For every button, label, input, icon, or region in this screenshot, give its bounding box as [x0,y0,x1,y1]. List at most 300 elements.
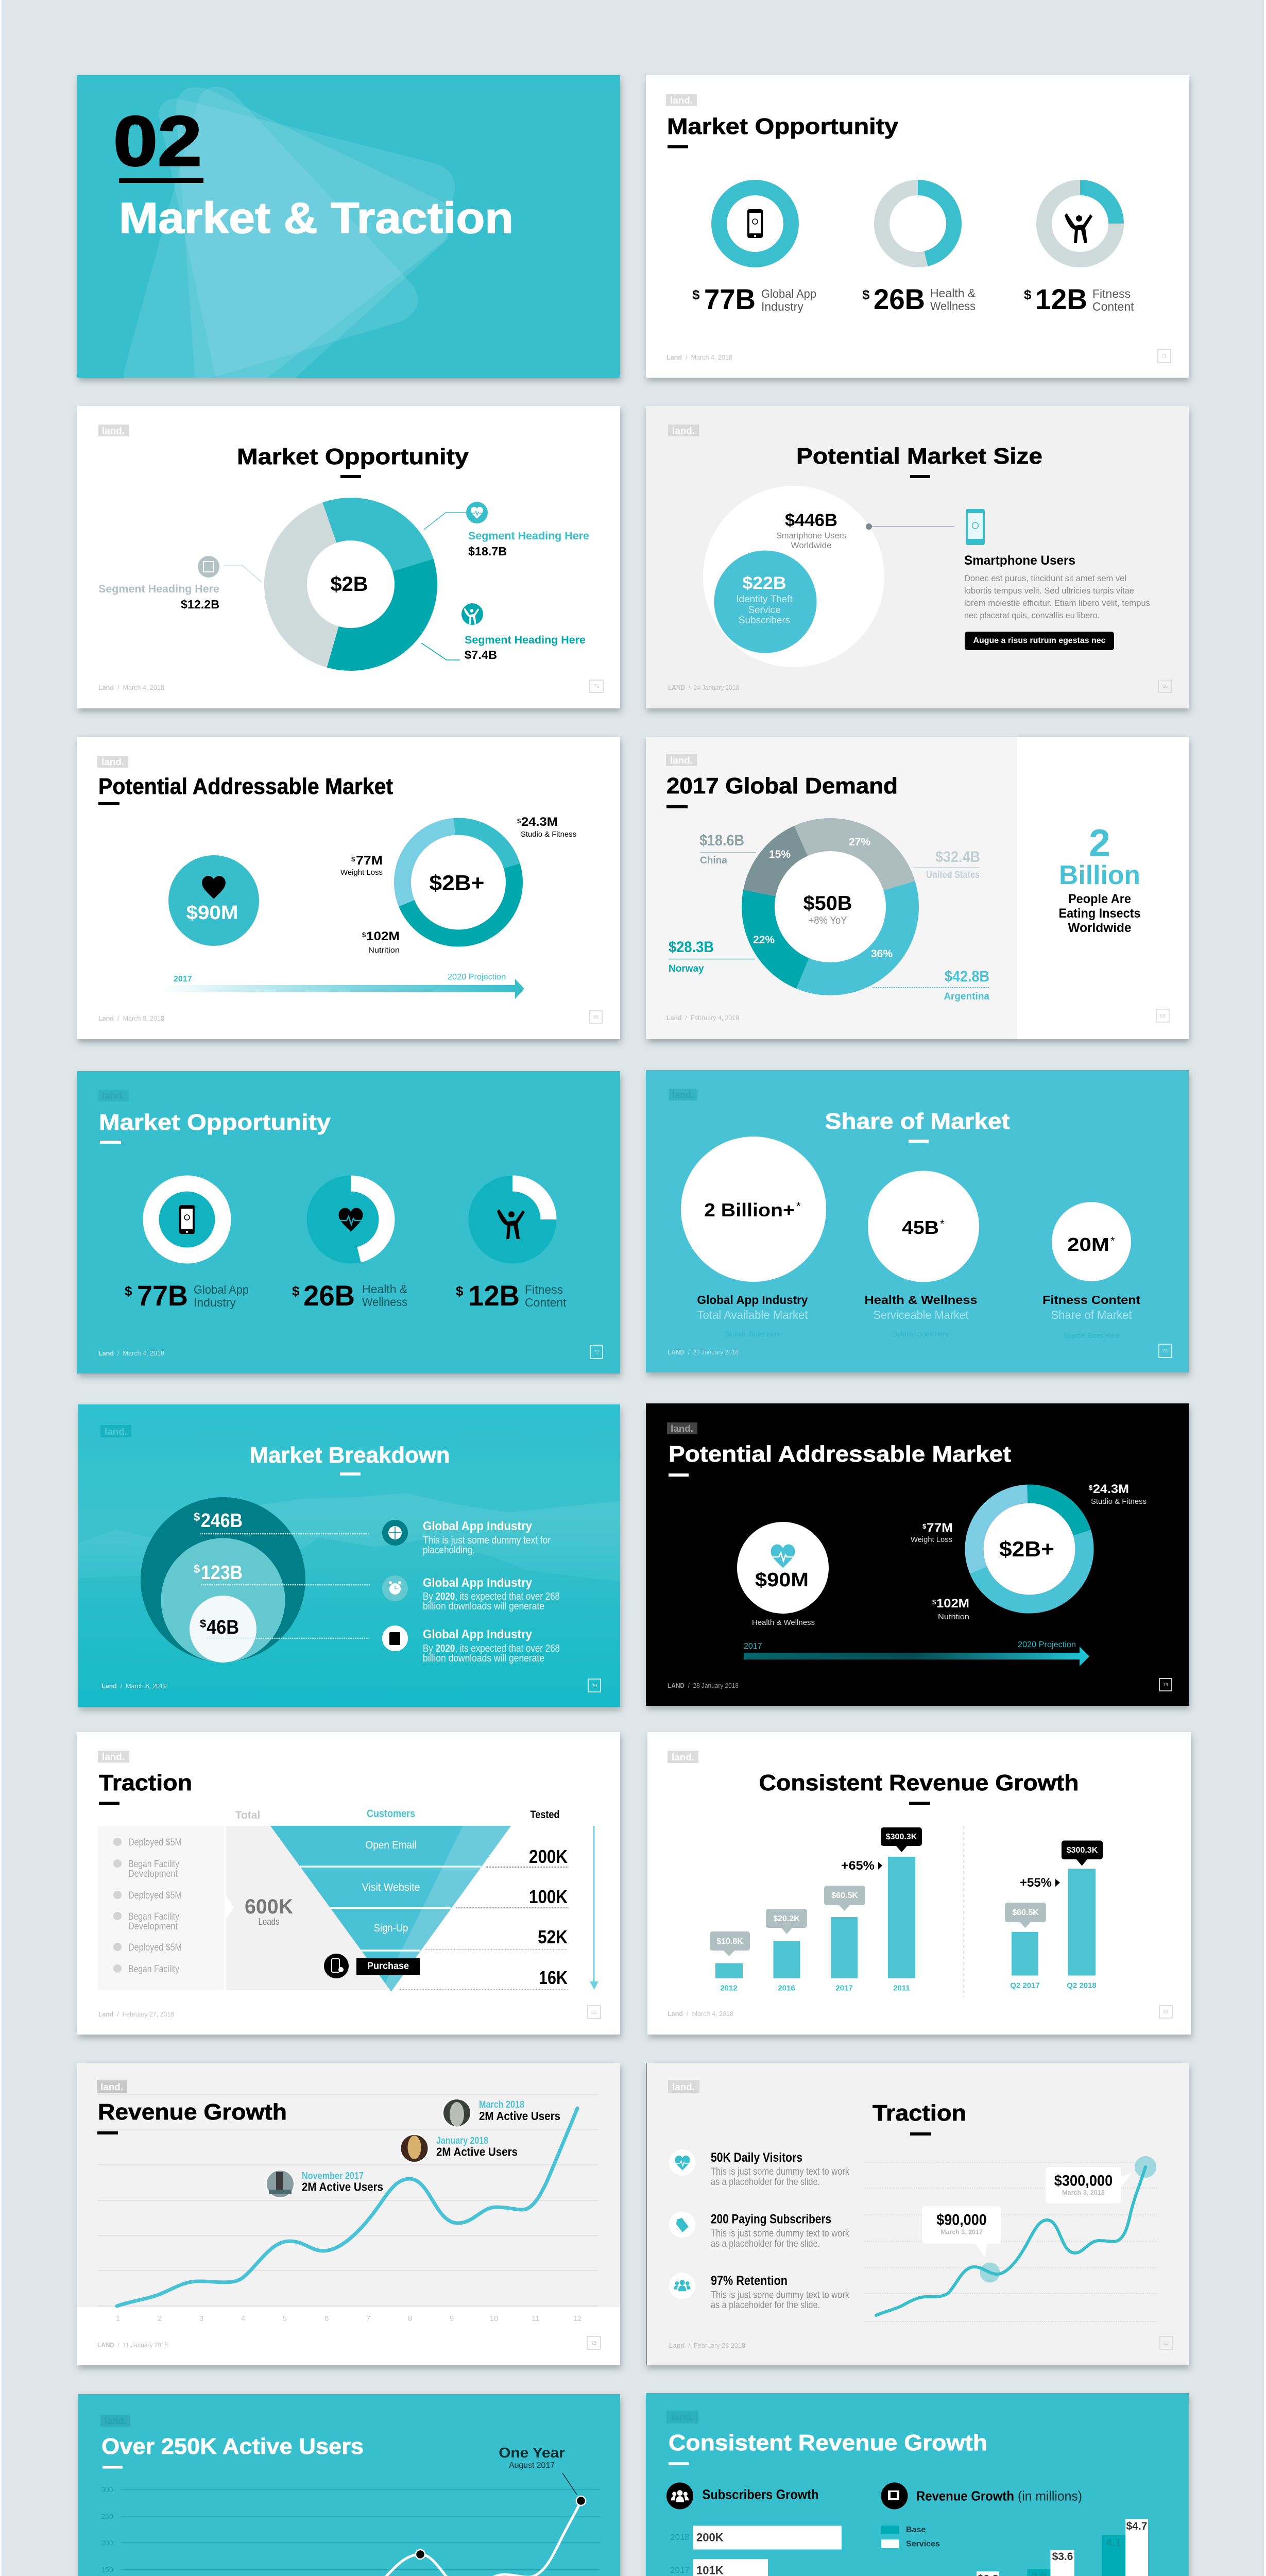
panel: active users line [78,2394,620,2576]
total leads block: 600K [245,1895,293,1918]
metric: paying subscribers: This is just some dummy text to work [711,2228,849,2239]
milestone: March 2018 [443,2099,560,2127]
bar chart: annual: 2017 [835,1984,853,1993]
label: health: Serviceable Market [874,1308,969,1321]
donut center [803,892,852,926]
label: nutrition: 102M [936,1597,969,1611]
inner market circle: Identity Theft [736,594,793,605]
callout: $300,000: $300,000 [1054,2172,1113,2190]
label: studio: $ [1089,1484,1093,1492]
stat: $77B: $ [125,1283,132,1299]
value: $46B: 46B [207,1617,239,1638]
grid lines [121,2489,601,2576]
stat: $26B: Health & [362,1282,407,1296]
logo: land. [105,2416,126,2426]
x axis labels: 8 [408,2314,412,2323]
label: Argentina [872,968,989,1002]
item: global app three: By 2020, its expected that over 268 [423,1643,560,1654]
callout: $60.5K: $60.5K [831,1891,858,1900]
icon: ball [382,1520,408,1546]
logo: land. [670,95,693,106]
title bar [910,2132,931,2136]
milestone list: Deployed $5M [128,1942,182,1953]
heading: subscribers growth [666,2482,819,2509]
footer: 62 [1164,2341,1169,2346]
bar chart: annual: 2012 [720,1984,738,1993]
footer: 63 [1163,2009,1168,2014]
quarter divider [963,1826,964,1997]
label: studio [1089,1482,1147,1506]
icon: clock [382,1575,408,1601]
stat: $26B: Wellness [362,1295,407,1309]
footer: Land / February 27, 2018 [98,2010,174,2018]
logo [668,1751,698,1763]
footer: LAND / 24 January 2018 [668,684,739,691]
icon: glass [382,1625,408,1651]
panel: section cover [77,75,620,378]
label: studio: 24.3M [1093,1482,1129,1496]
arrow timeline [161,973,524,999]
label: health: Source: Goes Here [893,1330,949,1338]
footer: 72 [591,2341,596,2346]
milestone list: Development [128,1869,178,1879]
growth: +55%: +55% [1020,1876,1052,1890]
callout: $20.2K: $20.2K [773,1914,800,1923]
donut: fitness [1044,188,1116,260]
label: health: Health & Wellness [864,1293,978,1307]
stat: $77B: Industry [761,300,803,313]
panel: potential addressable market dark [646,1403,1189,1706]
callout: $300,000: March 3, 2018 [1062,2189,1105,2196]
callout: quarterly $60.5K: $60.5K [1012,1908,1039,1917]
callout: quarterly $300.3K: $300.3K [1067,1846,1098,1855]
growth: +65%: +65% [841,1859,875,1873]
label: nutrition: Nutrition [938,1613,969,1621]
arrow timeline: 2017 [744,1642,762,1651]
chart: revenue bars: $3.6 [1052,2551,1073,2563]
text block: smartphone users: lorem molestie efficitur. Etiam libero velit, tempus [964,598,1150,608]
stat: $77B: 77B [137,1279,188,1312]
button [965,632,1114,650]
users curve [140,2501,581,2576]
bubble: 2 billion [681,1137,826,1282]
logo [100,2415,130,2427]
metric: paying subscribers: as a placeholder for the slide. [711,2239,820,2249]
value: $246B [194,1510,369,1534]
label: weight loss: $ [351,855,355,863]
heading: subscribers growth: Subscribers Growth [703,2486,819,2502]
circle: $90M [737,1522,829,1627]
arrow timeline: 2020 Projection [1018,1640,1076,1649]
value: $123B: 123B [201,1562,243,1584]
bar chart: annual: 2016 [778,1984,795,1993]
panel left edge [646,2063,647,2365]
stat: $12B: Content [1092,300,1134,313]
x axis labels: 7 [366,2314,370,2323]
title: Traction [872,2100,966,2126]
donut: global app [151,1183,223,1256]
milestone: January 2018: January 2018 [436,2136,488,2146]
title bar [99,1802,119,1805]
chart: subscribers bars: 2018 [670,2532,690,2542]
value: $123B: $ [194,1563,200,1575]
panel: traction metrics [646,2063,1189,2365]
logo [668,2080,699,2093]
donut: health [882,188,954,260]
logo: land. [672,1090,694,1100]
bubble: 2 billion: * [796,1200,801,1213]
label: weight loss: 77M [356,854,383,868]
logo: land. [101,757,124,767]
inner market circle: Service [748,605,781,616]
heading: revenue growth [881,2482,1082,2509]
background mountains [78,1493,620,1707]
x axis labels [116,2314,581,2323]
logo [97,2080,127,2093]
y axis labels: 150 [101,2566,113,2574]
logo [666,2411,698,2424]
marker: one year: August 2017 [509,2461,555,2470]
value: $246B: $ [194,1511,200,1523]
title: Potential Addressable Market [98,774,393,799]
title: Market Opportunity [667,114,899,139]
milestone: January 2018: 2M Active Users [436,2145,518,2159]
label: China: $18.6B [699,832,744,849]
title: Over 250K Active Users [101,2434,364,2459]
circle: $90M: Health & Wellness [752,1618,815,1627]
stat: $26B: $ [862,287,870,302]
label: studio: $ [517,817,521,825]
segmented donut [268,501,434,667]
stat: $12B [456,1279,567,1312]
footer: 68 [593,1014,598,1020]
logo [666,754,697,766]
logo: land. [670,755,693,766]
panel: market opportunity teal [77,1071,620,1374]
bar chart: quarterly: Q2 2018 [1067,1981,1097,1990]
footer [668,1344,1171,1358]
label: China: China [700,855,727,866]
purchase label [356,1958,420,1975]
donut percentages: 15% [769,849,791,860]
label: global app: Source: Goes Here [725,1330,780,1338]
top right segment callout: Segment Heading Here [468,530,589,542]
outer market circle: $446B [785,511,837,530]
legend: Services [906,2540,940,2548]
funnel: Sign-Up [374,1922,408,1934]
label: Norway [669,939,755,974]
title bar [669,1473,689,1477]
value: 52K: 52K [538,1926,568,1947]
total leads block [226,1826,390,1990]
panel: traction funnel [77,1732,620,2035]
title: Potential Market Size [796,444,1042,469]
chart: revenue bars [879,2519,1148,2576]
title: Share of Market [825,1109,1010,1134]
left segment callout [98,556,262,611]
callout: 2 billion: Billion [1059,860,1140,890]
bubble: 45B: 45B [902,1217,939,1238]
item: global app three [423,1628,560,1664]
funnel: Visit Website [362,1882,420,1893]
bubble: 20M: * [1110,1234,1115,1247]
value: $46B: $ [200,1617,206,1630]
stat: $26B [862,283,976,315]
logo: land. [100,2082,123,2092]
value: $46B [200,1617,369,1638]
value: $123B [194,1562,370,1585]
button: Augue a risus rutrum egestas nec [973,636,1106,645]
callout: $300.3K [881,1827,922,1852]
outer market circle: Worldwide [791,540,832,550]
title: Market Opportunity [99,1110,331,1135]
metric: paying subscribers: 200 Paying Subscribers [711,2212,831,2227]
metric: retention: as a placeholder for the slide. [711,2300,820,2311]
milestone: November 2017: November 2017 [302,2171,364,2181]
stat: $12B: $ [1024,287,1032,302]
donut percentages [753,836,893,960]
logo [97,756,128,768]
stat: $12B: Fitness [1092,287,1131,300]
title bar [102,2466,123,2469]
value: 200K: 200K [529,1846,568,1867]
bar chart: annual [715,1857,915,1993]
heading: revenue growth: (in millions) [1018,2488,1082,2504]
callout: $10.8K [710,1931,750,1956]
section title: Market & Traction [119,194,514,242]
panel: potential market size [646,406,1189,708]
footer: LAND / 11 January 2018 [97,2341,168,2349]
panel: potential addressable market light [77,737,620,1039]
label: nutrition: $ [362,931,366,939]
revenue curve [117,2108,577,2306]
decorative translucent triangles [124,87,455,378]
item: global app one: placeholding. [423,1545,475,1556]
donut center: $50B [803,892,852,914]
donut: fitness [469,1176,556,1263]
heading: revenue growth: Revenue Growth [916,2488,1014,2504]
panel: global demand [646,737,1189,1039]
stat: $12B [1024,283,1134,315]
donut percentages: 27% [849,836,870,848]
title bar [666,805,688,808]
bubble: 20M [1052,1202,1131,1281]
milestone list: Deployed $5M [128,1890,182,1901]
footer [668,680,1172,692]
bar chart: quarterly [1010,1869,1097,1990]
footer [97,2336,601,2349]
panel: market opportunity segments [77,406,620,708]
label: weight loss: 77M [927,1521,953,1535]
title bar [100,1141,121,1144]
metric: retention: 97% Retention [711,2274,788,2288]
value: 100K: 100K [529,1886,568,1907]
circle: $90M: $90M [755,1569,809,1591]
metric: daily visitors [669,2149,849,2188]
footer: 61 [591,2010,596,2015]
milestone list [98,1826,225,1990]
column headers: Customers [367,1808,415,1820]
donut: health [307,1176,395,1263]
callout: $60.5K [824,1886,865,1911]
stat: $77B [692,283,816,315]
x axis labels: 4 [241,2314,245,2323]
stat: $12B: 12B [468,1279,520,1312]
label: Norway: Norway [669,963,704,974]
title: Consistent Revenue Growth [759,1770,1079,1795]
chart: subscribers bars [670,2526,842,2576]
milestone: November 2017 [266,2170,383,2198]
footer: Land / March 4, 2018 [98,684,164,691]
stat: $77B: Industry [194,1296,236,1309]
arrow timeline [744,1640,1089,1666]
label: United States: $32.4B [935,849,980,866]
milestone list: Development [128,1921,178,1932]
logo: land. [671,2412,694,2422]
title: Traction [99,1770,192,1795]
column headers [235,1808,559,1821]
footer [669,2336,1173,2349]
logo: land. [102,1091,125,1101]
logo [98,425,129,436]
title: Market Breakdown [249,1443,450,1468]
callout: $20.2K [766,1909,807,1934]
label: nutrition: Nutrition [368,946,400,955]
donut: $2B+ [961,1480,1098,1618]
y axis labels [101,2485,113,2576]
donut center value: $2B [331,573,368,596]
grey left area [646,737,1017,1039]
label: studio: 24.3M [521,815,558,829]
label: nutrition: 102M [366,929,400,943]
bar chart: quarterly: Q2 2017 [1010,1981,1040,1990]
label: Norway: $28.3B [669,939,714,956]
metric: retention: This is just some dummy text to work [711,2290,849,2301]
callout: 2 billion: People Are [1068,892,1131,906]
label: studio: Studio & Fitness [521,830,576,839]
milestone: November 2017: 2M Active Users [302,2180,383,2194]
callout: $300,000 [1046,2167,1133,2204]
label: Argentina: Argentina [944,991,989,1002]
text block: smartphone users: lobortis tempus velit. Sed ultricies turpis vitae [964,586,1134,596]
callout: $90,000: March 3, 2017 [940,2228,983,2236]
logo: land. [672,1752,694,1762]
label: United States [913,849,980,880]
x axis labels: 9 [450,2314,454,2323]
stat: $77B: Global App [194,1283,249,1296]
stat: $26B: 26B [874,283,925,315]
connector [866,523,954,530]
logo: land. [102,1752,125,1762]
icon: hand with phone [324,1954,349,1978]
title bar [97,2131,118,2134]
donut percentages: 36% [871,948,893,960]
circle: $90M [168,855,259,946]
footer: 66 [1162,684,1168,689]
footer: 70 [592,1683,597,1688]
outer market circle [703,486,884,667]
milestone list: Began Facility [128,1859,179,1870]
metric: daily visitors: as a placeholder for the slide. [711,2177,820,2188]
section number: 02 [113,102,202,181]
callout: $90,000: $90,000 [936,2211,987,2229]
label: weight loss: $ [922,1522,927,1530]
panel: consistent revenue growth bars [647,1732,1191,2035]
y axis labels: 300 [101,2485,113,2494]
grey chart area [77,2063,620,2307]
label: nutrition: $ [932,1598,936,1606]
bar chart: annual: 2011 [893,1984,910,1993]
outer market circle: Smartphone Users [776,531,846,540]
label: studio: Studio & Fitness [1091,1497,1147,1506]
logo: land. [672,2082,695,2092]
panel: market breakdown [78,1404,620,1707]
donut center value: $2B+ [430,871,484,895]
nested circles [141,1497,305,1663]
footer: LAND / 20 January 2018 [668,1348,739,1356]
title bar [909,1140,929,1143]
footer: 79 [1163,1682,1168,1687]
footer [98,680,603,692]
logo: land. [105,1427,127,1437]
label: Argentina: $42.8B [945,968,989,985]
metric: retention [669,2273,849,2311]
grid lines [864,2162,1157,2321]
logo [668,425,699,436]
legend: Base [906,2526,926,2534]
y axis labels: 250 [101,2512,113,2520]
metric: paying subscribers [669,2211,849,2249]
title: Consistent Revenue Growth [669,2430,987,2455]
callout: quarterly $300.3K [1062,1840,1103,1866]
title bar [668,145,688,148]
total leads block: Leads [259,1917,279,1927]
stat: $77B: $ [692,287,700,302]
bottom right segment callout [421,603,586,662]
footer: Land / March 4, 2018 [668,2010,733,2018]
item: global app two: By 2020, its expected that over 268 [423,1591,560,1602]
x axis labels: 12 [573,2314,581,2323]
milestone list: Began Facility [128,1964,179,1975]
left segment callout: Segment Heading Here [98,583,219,595]
footer: 68 [1160,1013,1165,1019]
funnel: Open Email [366,1839,416,1851]
callout: 2 billion: Worldwide [1068,921,1132,935]
marker: one year [499,2445,586,2505]
label: China [699,832,756,866]
stat: $26B: $ [292,1283,300,1299]
logo [98,1090,129,1101]
milestone list: Began Facility [128,1911,179,1922]
footer: Land / March 8, 2018 [98,1014,164,1022]
item: global app three: Global App Industry [423,1628,533,1641]
marker: midpoint [416,2550,425,2559]
item: global app one: Global App Industry [423,1519,533,1533]
title bar [340,475,361,478]
column headers: Tested [531,1809,559,1821]
x axis labels: 2 [158,2314,162,2323]
donut center value: $2B+ [999,1537,1054,1561]
footer [668,2006,1172,2018]
bubble: 2 billion: 2 Billion+ [704,1199,795,1221]
title bar [98,802,119,805]
arrow: down [590,1826,598,1990]
highlight dots [980,2156,1156,2282]
x axis labels: 1 [116,2314,120,2323]
footer: 71 [1161,353,1167,359]
logo: land. [672,426,695,436]
logo [666,94,697,106]
